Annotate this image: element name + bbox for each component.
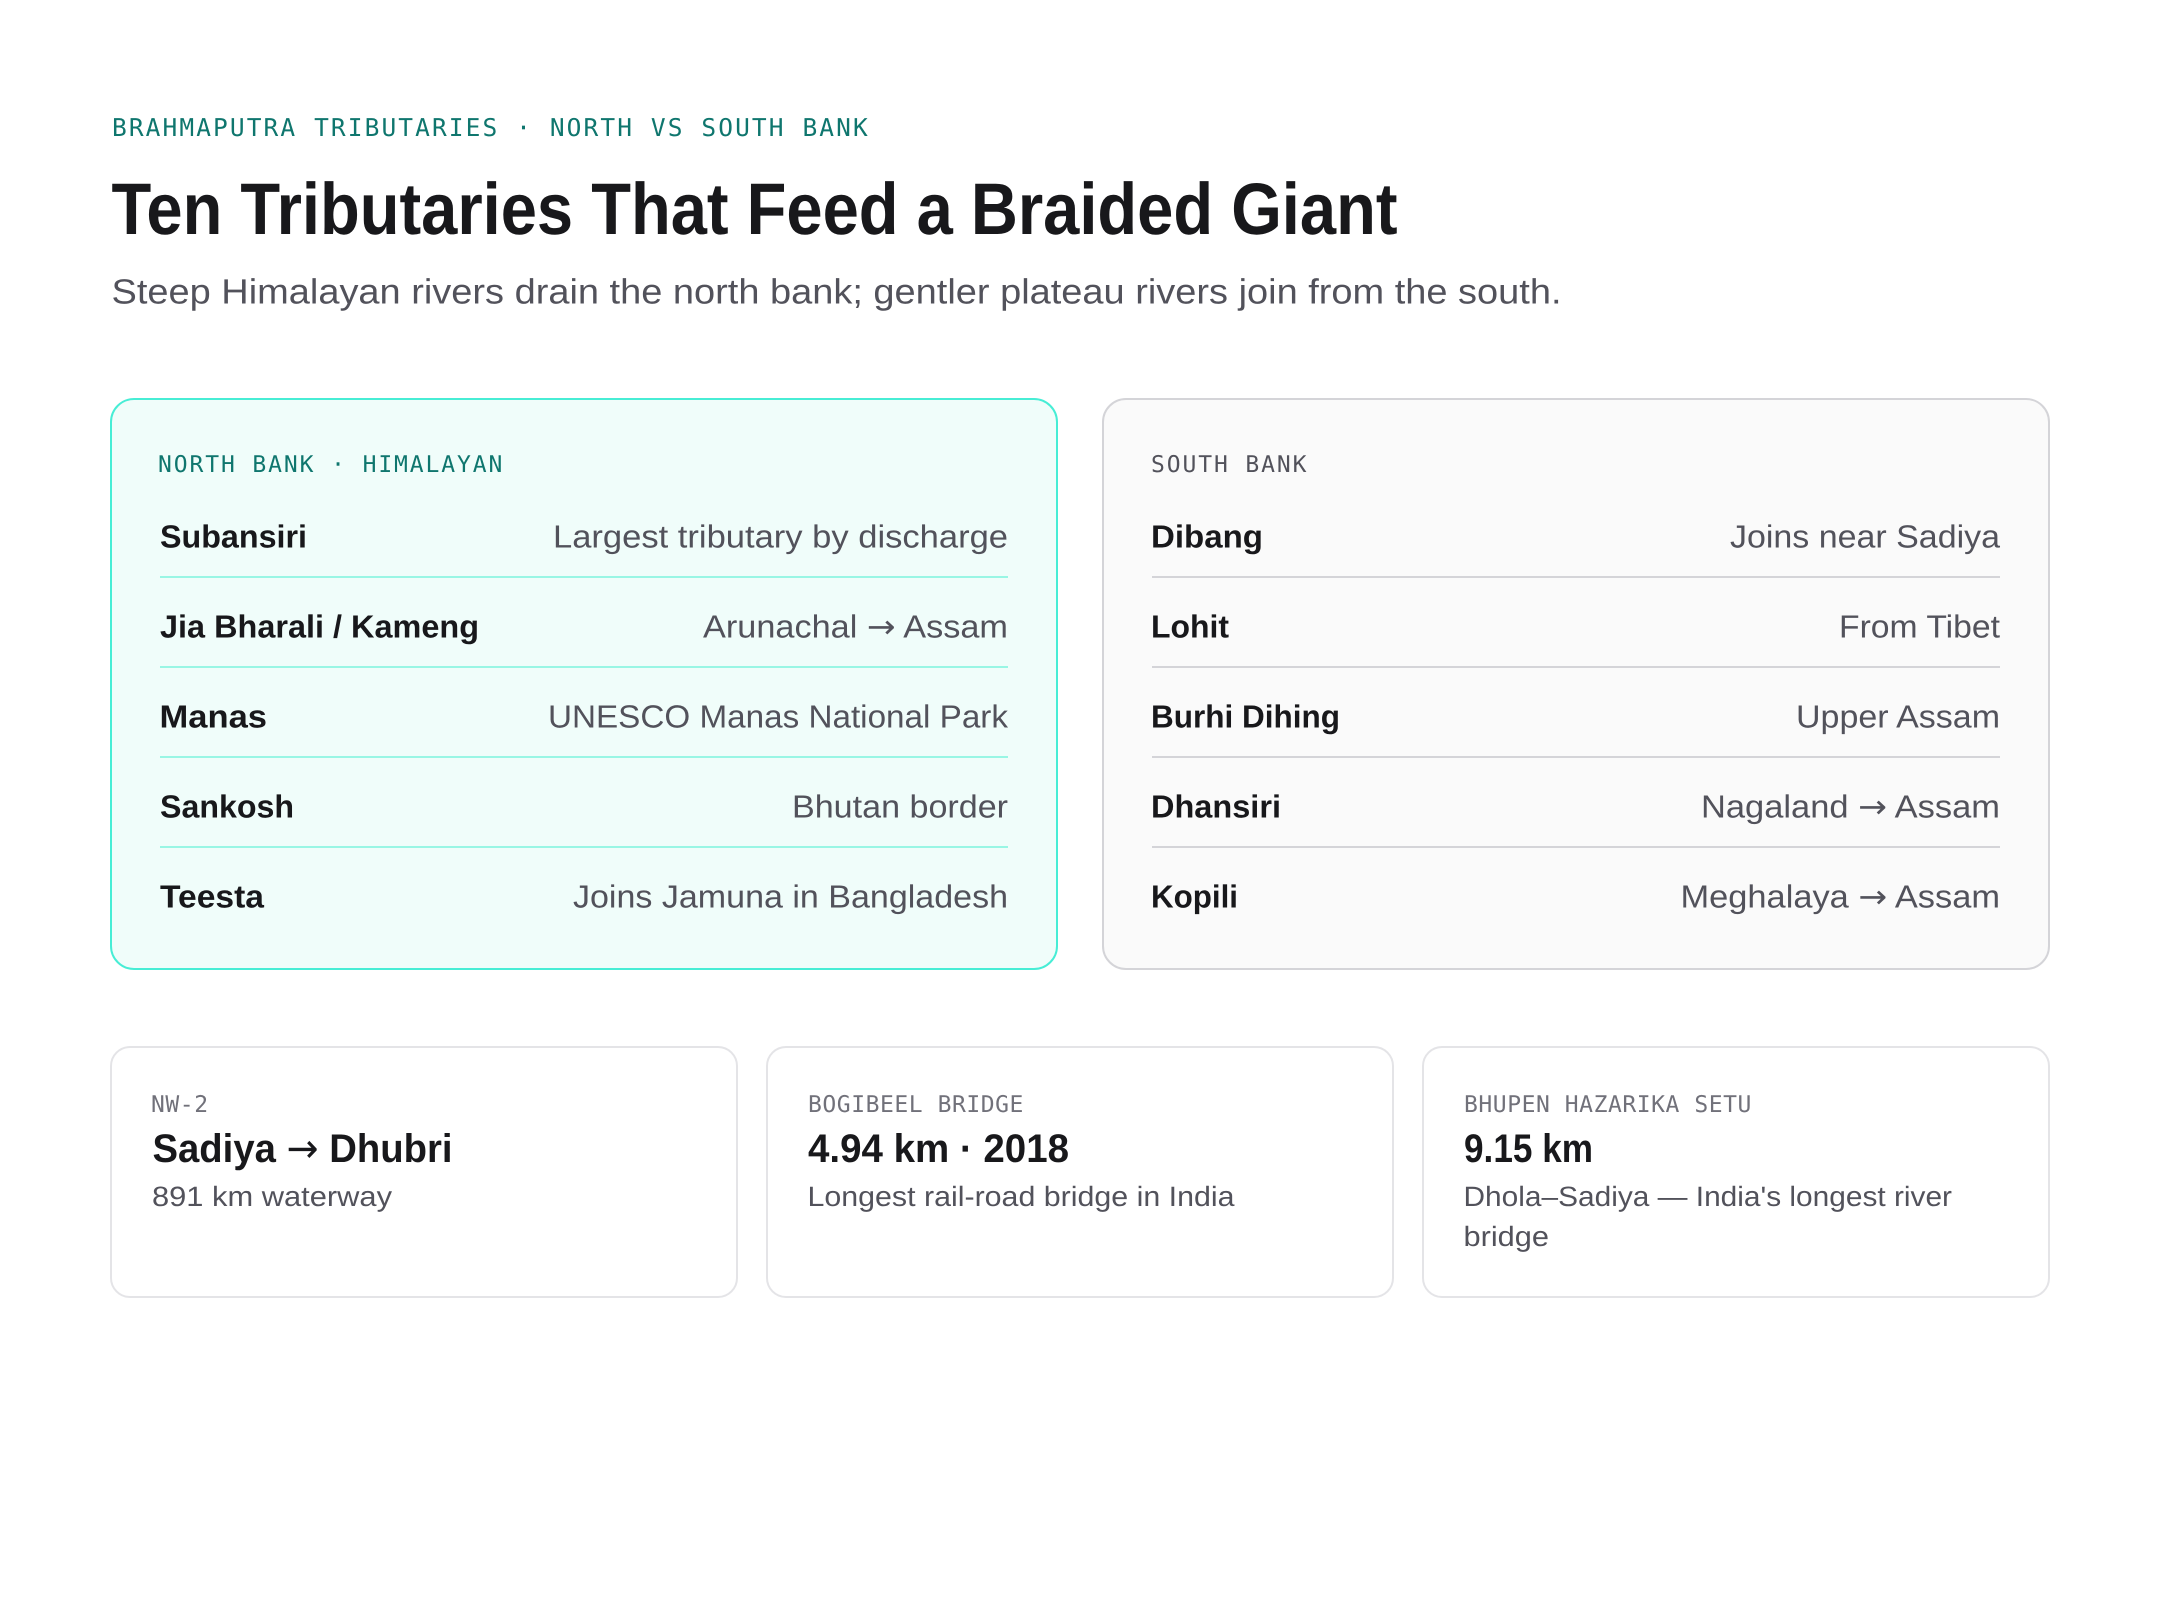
- row: Kopili: Kopili: [1151, 878, 1238, 914]
- card: Bhupen Hazarika Setu: Dhola–Sadiya — India's longest river: [1464, 1181, 1952, 1212]
- card: NW-2: NW-2: [151, 1092, 209, 1118]
- row: Teesta: Teesta: [160, 878, 264, 914]
- row: Teesta: Joins Jamuna in Bangladesh: [573, 878, 1008, 914]
- row: Sankosh: [160, 788, 1008, 824]
- header: [112, 113, 1562, 312]
- south bank heading: SOUTH BANK: [1151, 452, 1308, 478]
- subtitle: Steep Himalayan rivers drain the north bank; gentler plateau rivers join from the south.: [112, 272, 1562, 312]
- row: Manas: UNESCO Manas National Park: [548, 698, 1009, 734]
- row: Dibang: [1151, 518, 2000, 554]
- row: Dibang: Dibang: [1151, 518, 1263, 554]
- row: Lohit: Lohit: [1151, 608, 1229, 644]
- panel: south bank: [1103, 399, 2049, 969]
- row: Jia Bharali / Kameng: Jia Bharali / Kameng: [160, 608, 479, 644]
- card: Bogibeel Bridge: BOGIBEEL BRIDGE: [808, 1092, 1024, 1118]
- row: Jia Bharali / Kameng: Arunachal → Assam: [703, 608, 1008, 646]
- title: Ten Tributaries That Feed a Braided Giant: [112, 169, 1398, 250]
- row: Sankosh: Bhutan border: [792, 788, 1008, 824]
- row: Burhi Dihing: Upper Assam: [1796, 698, 2000, 734]
- card: Bhupen Hazarika Setu: 9.15 km: [1464, 1127, 1593, 1171]
- row: Dhansiri: Dhansiri: [1151, 788, 1281, 824]
- row: Dhansiri: [1151, 788, 2000, 826]
- row: Kopili: [1151, 878, 2000, 916]
- row: Manas: [160, 698, 1009, 734]
- panel: north bank: [111, 399, 1057, 969]
- north bank heading: NORTH BANK · HIMALAYAN: [158, 452, 504, 478]
- card: Bhupen Hazarika Setu: [1423, 1047, 2049, 1297]
- row: Jia Bharali / Kameng: [160, 608, 1008, 646]
- row: Burhi Dihing: [1151, 698, 2000, 734]
- row: Subansiri: Subansiri: [160, 518, 307, 554]
- card: NW-2: [111, 1047, 737, 1297]
- eyebrow: BRAHMAPUTRA TRIBUTARIES · NORTH VS SOUTH BANK: [112, 113, 870, 142]
- row: Lohit: [1151, 608, 2000, 644]
- card: Bhupen Hazarika Setu: BHUPEN HAZARIKA SETU: [1464, 1092, 1752, 1118]
- row: Lohit: From Tibet: [1839, 608, 2000, 644]
- card: NW-2: 891 km waterway: [152, 1181, 392, 1212]
- card: Bogibeel Bridge: [767, 1047, 1393, 1297]
- row: Sankosh: Sankosh: [160, 788, 294, 824]
- row: Subansiri: [160, 518, 1008, 554]
- row: Kopili: Meghalaya → Assam: [1680, 878, 2000, 916]
- row: Burhi Dihing: Burhi Dihing: [1151, 698, 1340, 734]
- row: Dibang: Joins near Sadiya: [1730, 518, 2000, 554]
- card: NW-2: Sadiya → Dhubri: [152, 1126, 452, 1172]
- row: Subansiri: Largest tributary by discharge: [553, 518, 1008, 554]
- card: Bogibeel Bridge: Longest rail-road bridge in India: [808, 1181, 1235, 1212]
- card: Bogibeel Bridge: 4.94 km · 2018: [808, 1127, 1069, 1171]
- row: Manas: Manas: [160, 698, 267, 734]
- card: Bhupen Hazarika Setu: bridge: [1464, 1221, 1549, 1252]
- row: Dhansiri: Nagaland → Assam: [1701, 788, 2000, 826]
- row: Teesta: [160, 878, 1008, 914]
